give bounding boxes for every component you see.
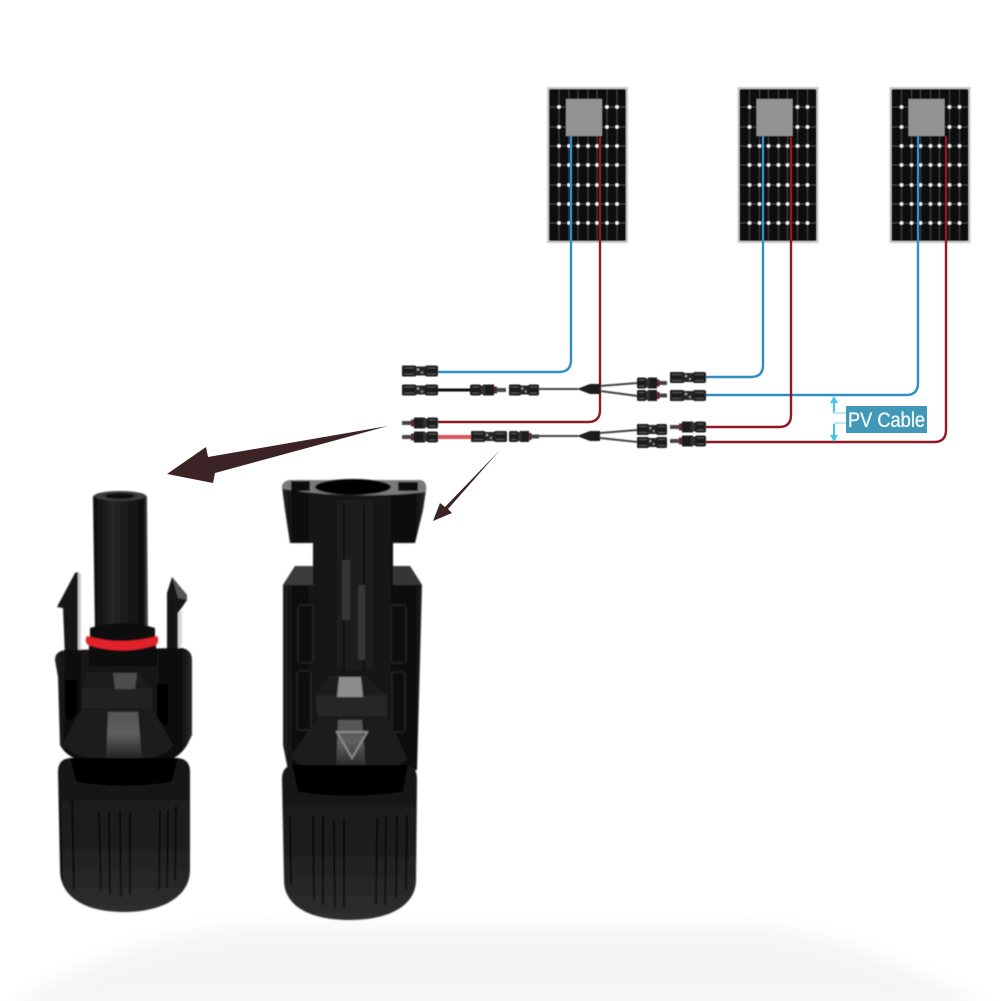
windows	[65, 679, 77, 721]
thread	[70, 758, 178, 786]
head rim	[282, 480, 426, 495]
cone	[62, 672, 173, 762]
collar	[90, 623, 155, 650]
nut	[58, 758, 190, 912]
PV Cable callout	[830, 396, 927, 442]
female connector photo	[282, 479, 426, 920]
nut	[282, 765, 417, 920]
callout dimension arrow	[830, 396, 846, 442]
logo triangle	[337, 732, 367, 758]
neck spine	[337, 500, 373, 670]
locking clips	[57, 572, 78, 657]
branch connector group: red line	[402, 418, 706, 448]
cone	[290, 676, 407, 773]
solar panel 3	[890, 87, 970, 243]
red ring	[86, 636, 158, 650]
male connector photo	[55, 491, 192, 912]
neck marking	[342, 560, 365, 660]
tube	[93, 492, 148, 630]
branch connector group: black line	[402, 366, 706, 401]
solar panel 2	[738, 87, 818, 243]
head and body	[282, 480, 426, 770]
callout label: PV Cable	[848, 409, 925, 432]
solar panel 1	[547, 87, 628, 243]
nut ribs	[60, 800, 176, 897]
shoulder highlights	[284, 566, 313, 585]
thread	[292, 765, 408, 796]
nut ribs	[290, 815, 407, 908]
windows	[297, 605, 406, 732]
body	[55, 648, 192, 762]
arrow to female connector	[433, 450, 500, 521]
arrow to male connector	[167, 426, 388, 483]
background floor shadow	[6, 925, 995, 1001]
blue and red PV cables	[438, 136, 946, 442]
